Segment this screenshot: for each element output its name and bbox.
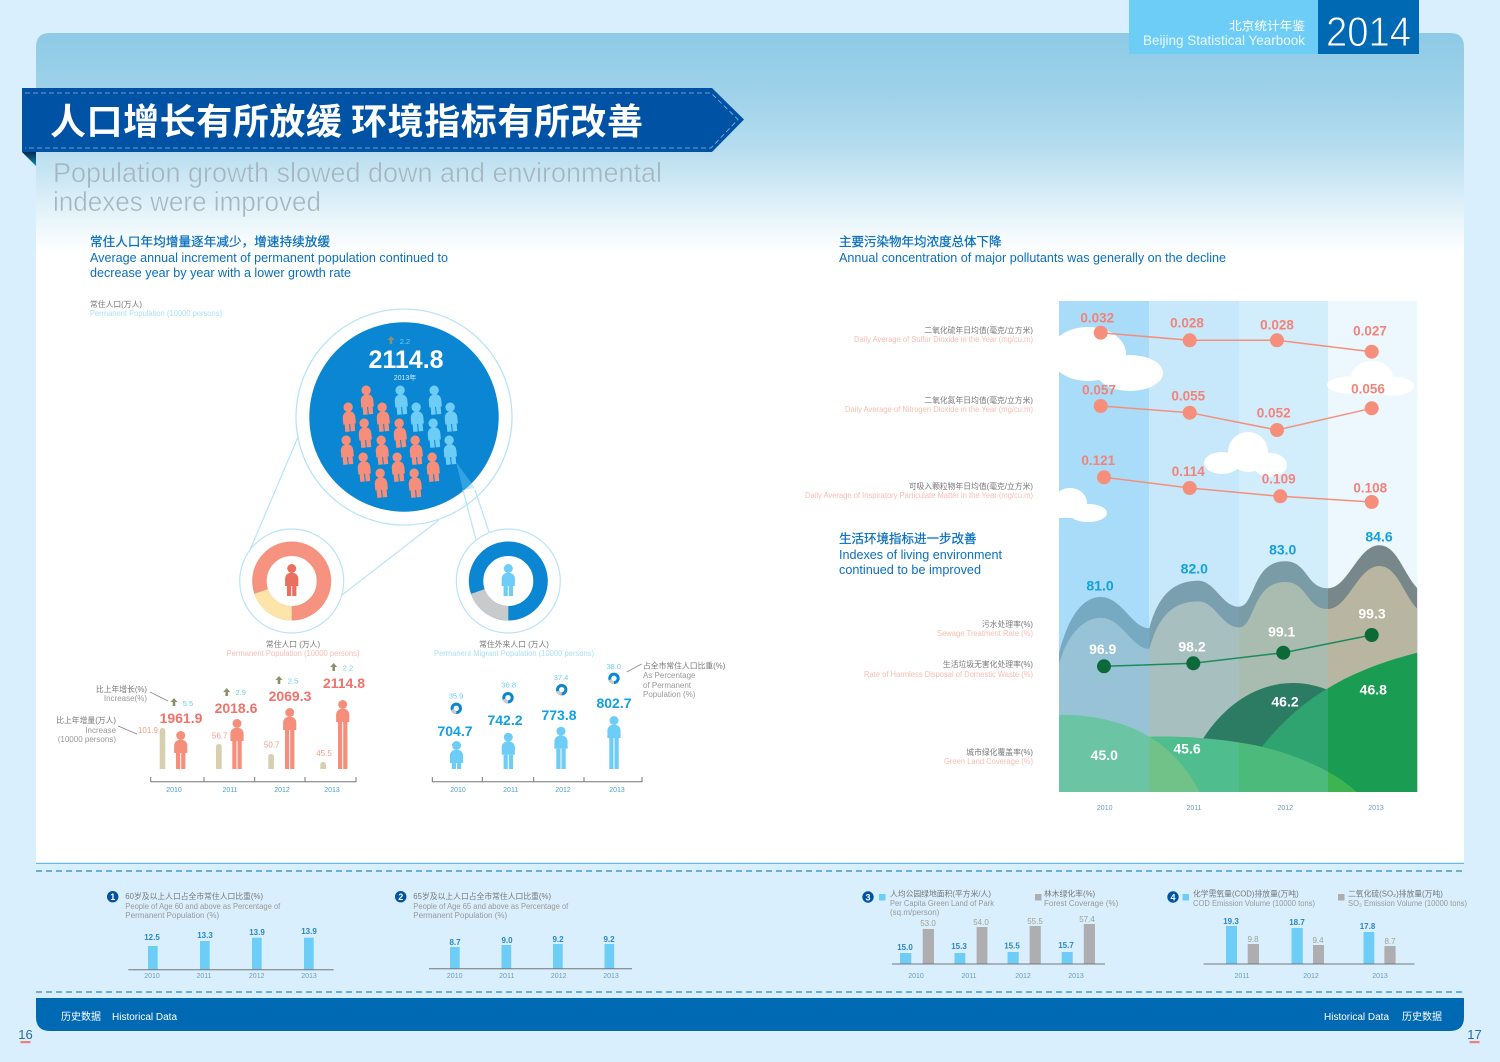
mini chart 4: COD and SO2 emission: 4 (1170, 892, 1176, 902)
line series: nitrogen dioxide: 0.055 (1171, 388, 1206, 403)
caption: permanent population: Permanent Population (10000 persons) (226, 649, 360, 658)
english subtitle: indexes were improved (53, 186, 321, 217)
mini chart 3: park green land and forest coverage: 54.0 (973, 918, 989, 927)
mini chart 3: park green land and forest coverage: Forest Coverage (%) (1044, 899, 1119, 908)
header tab: yearbook name and year: Beijing Statistical Yearbook (1143, 32, 1306, 48)
annotation: percentage of permanent population (627, 661, 726, 699)
mini donuts and shares: 38.0 (606, 662, 621, 671)
mini chart 3: park green land and forest coverage (862, 888, 1119, 980)
mini chart 4: COD and SO2 emission (1167, 888, 1467, 980)
mini donuts and shares (449, 662, 621, 712)
mini chart 4: COD and SO2 emission: 2013 (1372, 973, 1388, 980)
mini chart 1: age 60 and above: 2011 (196, 973, 212, 980)
mini chart 3: park green land and forest coverage: 57.4 (1079, 915, 1095, 924)
series labels for right chart: Green Land Coverage (%) (944, 757, 1033, 766)
increase values: 101.9 (138, 726, 159, 735)
year axis: 2012 (274, 787, 290, 794)
caption: migrant population (434, 639, 594, 658)
green coverage values: 45.6 (1173, 740, 1201, 756)
year labels: 2012 (1278, 805, 1293, 812)
chart: migrant population people bars (432, 661, 726, 794)
mini chart 3: park green land and forest coverage: 2012 (1015, 973, 1031, 980)
sewage treatment values: 81.0 (1086, 577, 1114, 593)
mini chart 1: age 60 and above: 2013 (301, 973, 317, 980)
line series: waste disposal rate: 99.1 (1268, 624, 1296, 640)
mini chart 2: age 65 and above: 9.2 (603, 935, 615, 944)
chart: permanent population people bars (56, 663, 365, 794)
series labels for right chart: 可吸入颗粒物年日均值(毫克/立方米) (909, 481, 1033, 491)
caption: permanent population: 常住人口 (万人) (266, 639, 320, 649)
series labels for right chart: 生活垃圾无害化处理率(%) (943, 659, 1033, 669)
green coverage values: 45.0 (1091, 747, 1118, 763)
footer bar: historical data: Historical Data (112, 1012, 177, 1023)
annotation: percentage of permanent population: 占全市常住人口比重(%) (643, 661, 726, 671)
footer bar: historical data: 历史数据 (61, 1010, 101, 1023)
clouds (1047, 327, 1414, 522)
mini chart 3: park green land and forest coverage: 15.3 (951, 942, 967, 951)
line series: nitrogen dioxide: 0.057 (1082, 382, 1116, 397)
mini chart 1: age 60 and above: 13.9 (249, 928, 265, 937)
mini chart 4: COD and SO2 emission: 17.8 (1360, 922, 1376, 931)
mini chart 3: park green land and forest coverage: 2011 (961, 973, 977, 980)
annotation: percentage of permanent population: of Permanent (643, 681, 692, 690)
annotation: percentage of permanent population: Population (%) (643, 690, 696, 699)
annotation labels: 比上年增长(%) (96, 684, 147, 694)
year axis: 2010 (166, 787, 182, 794)
mini chart 1: age 60 and above: 60岁及以上人口占全市常住人口比重(%) (125, 891, 263, 901)
mini chart 2: age 65 and above: Permanent Population (%) (413, 911, 507, 920)
mini donuts and shares: 35.9 (449, 692, 463, 701)
mini chart 4: COD and SO2 emission: 化学需氧量(COD)排放量(万吨) (1193, 888, 1299, 898)
sewage treatment values: 84.6 (1365, 529, 1393, 545)
series labels for right chart: 城市绿化覆盖率(%) (966, 747, 1033, 757)
english subtitle (53, 157, 662, 217)
mini chart 1: age 60 and above (107, 891, 334, 980)
mini chart 1: age 60 and above: People of Age 60 and above as Percentage of (125, 902, 281, 911)
mini chart 2: age 65 and above: 9.2 (552, 935, 564, 944)
big circle: 2013 population: 2114.8 (368, 346, 444, 374)
mini chart 3: park green land and forest coverage: 人均公园绿地面积(平方米/人) (890, 888, 991, 898)
year labels: 2013 (1368, 805, 1384, 812)
mini chart 1: age 60 and above: 13.9 (301, 927, 317, 936)
line series: waste disposal rate (1089, 606, 1386, 673)
right chart panel (1047, 301, 1417, 812)
line series: inspirable particulate matter (1081, 453, 1388, 509)
mini chart 3: park green land and forest coverage: 3 (865, 892, 871, 902)
population values (160, 675, 365, 726)
line series: nitrogen dioxide: 0.052 (1257, 406, 1291, 421)
mini donuts and shares: 36.8 (501, 681, 516, 690)
sewage treatment values: 82.0 (1181, 560, 1208, 576)
title ribbon (22, 88, 744, 166)
year labels: 2011 (1186, 805, 1202, 812)
mini chart 4: COD and SO2 emission: 19.3 (1223, 917, 1239, 926)
growth arrows and rates: 2.5 (288, 677, 298, 686)
mini chart 2: age 65 and above (395, 891, 632, 980)
mini chart 4: COD and SO2 emission: 9.4 (1312, 936, 1324, 945)
population values: 2069.3 (269, 688, 312, 704)
heading: population: 常住人口年均增量逐年减少，增速持续放缓 (90, 234, 330, 249)
footer bar: historical data (36, 998, 1464, 1031)
mini chart 3: park green land and forest coverage: 2013 (1068, 973, 1084, 980)
mini chart 4: COD and SO2 emission: 2012 (1303, 973, 1319, 980)
blue people (450, 716, 621, 769)
connector lines between circles (250, 437, 489, 595)
population values: 1961.9 (160, 710, 203, 726)
green hills: green land coverage (1059, 653, 1417, 792)
heading: population (90, 234, 448, 280)
line series: inspirable particulate matter: 0.108 (1353, 480, 1388, 495)
mini chart 1: age 60 and above: 1 (110, 892, 115, 902)
mini chart 3: park green land and forest coverage: 55.5 (1027, 917, 1043, 926)
big circle: 2013 population: 2.2 (400, 337, 410, 346)
footer bar: historical data: 历史数据 (1402, 1010, 1442, 1023)
series labels for right chart: Daily Average of Sulfur Dioxide in the Year (mg/cu.m) (854, 335, 1033, 344)
series labels for right chart: Daily Average of Nitrogen Dioxide in the Year (mg/cu.m) (845, 405, 1033, 414)
line series: nitrogen dioxide (1082, 381, 1385, 437)
line series: sulfur dioxide: 0.028 (1170, 315, 1204, 330)
line series: inspirable particulate matter: 0.114 (1172, 464, 1205, 479)
mini chart 4: COD and SO2 emission: 8.7 (1384, 937, 1396, 946)
heading: pollutants: Annual concentration of major pollutants was generally on the decline (839, 251, 1226, 265)
mini chart 4: COD and SO2 emission: SO₂ Emission Volume (10000 tons) (1348, 899, 1467, 908)
mini chart 2: age 65 and above: 65岁及以上人口占全市常住人口比重(%) (413, 891, 551, 901)
bottom strip dividers (36, 864, 1464, 992)
icon: coral and blue crowd (339, 385, 475, 498)
heading: living environment: Indexes of living environment (839, 548, 1003, 562)
year axis: 2011 (503, 787, 518, 794)
annotation labels: 比上年增量(万人) (56, 715, 116, 725)
series labels for right chart: 二氧化氮年日均值(毫克/立方米) (924, 395, 1033, 405)
label: permanent population: Permanent Population (10000 persons) (90, 309, 222, 318)
year labels: 2010 (1097, 805, 1113, 812)
annotation: percentage of permanent population: As Percentage (643, 671, 696, 680)
year axis: 2013 (324, 787, 340, 794)
heading: living environment (839, 531, 1003, 577)
header tab: yearbook name and year: 北京统计年鉴 (1229, 19, 1305, 33)
annotation labels: (10000 persons) (58, 735, 116, 744)
heading: pollutants: 主要污染物年均浓度总体下降 (839, 234, 1002, 249)
year axis: 2013 (609, 787, 625, 794)
annotation labels: Increase (85, 726, 117, 735)
line series: sulfur dioxide: 0.032 (1080, 310, 1114, 325)
caption: migrant population: 常住外来人口 (万人) (479, 639, 549, 649)
green coverage values: 46.8 (1360, 681, 1387, 697)
heading: population: Average annual increment of permanent population continued to (90, 251, 448, 265)
mini donuts and shares: 37.4 (554, 673, 568, 682)
line series: sulfur dioxide: 0.027 (1353, 324, 1387, 339)
title ribbon: 人口增长有所放缓 环境指标有所改善 (50, 93, 643, 145)
mini chart 3: park green land and forest coverage: 15.5 (1004, 942, 1020, 950)
label: permanent population: 常住人口(万人) (90, 299, 142, 309)
mini chart 2: age 65 and above: 2 (398, 892, 403, 902)
mini chart 2: age 65 and above: 9.0 (501, 936, 513, 945)
line series: waste disposal rate: 98.2 (1178, 638, 1206, 654)
mountain bands: sewage treatment and waste disposal (1059, 545, 1417, 800)
header tab: yearbook name and year: 2014 (1326, 8, 1411, 55)
mini chart 3: park green land and forest coverage: 53.0 (920, 919, 936, 928)
mini chart 1: age 60 and above: 2012 (249, 973, 265, 980)
increase values (138, 726, 332, 758)
main panel with gradient background (36, 33, 1464, 862)
mini chart 2: age 65 and above: People of Age 65 and above as Percentage of (413, 902, 569, 911)
mini chart 1: age 60 and above: Permanent Population (%) (125, 911, 219, 920)
page number 17: 17 (1467, 1027, 1482, 1042)
big circle: 2013 population: 2013年 (394, 373, 416, 382)
beige increase bars (160, 728, 326, 769)
mini chart 1: age 60 and above: 2010 (144, 973, 160, 980)
mini chart 3: park green land and forest coverage: 15.7 (1058, 941, 1074, 950)
mini chart 4: COD and SO2 emission: 2011 (1234, 973, 1250, 980)
increase values: 50.7 (264, 741, 280, 750)
mini chart 4: COD and SO2 emission: 18.7 (1289, 918, 1305, 927)
green coverage values: 46.2 (1271, 694, 1299, 710)
mini chart 1: age 60 and above: 12.5 (144, 933, 160, 942)
growth arrows and rates: 2.2 (343, 664, 353, 673)
migrant values: 773.8 (541, 707, 577, 723)
increase values: 56.7 (212, 732, 228, 741)
donut: migrant population (456, 529, 560, 633)
year axis: 2012 (555, 787, 571, 794)
series labels for right chart: Sewage Treatment Rate (%) (937, 629, 1033, 638)
line series: waste disposal rate: 96.9 (1089, 641, 1117, 657)
increase values: 45.5 (316, 749, 332, 758)
green coverage values (1091, 681, 1387, 763)
line series: inspirable particulate matter: 0.109 (1262, 471, 1296, 486)
series labels for right chart: 污水处理率(%) (982, 619, 1033, 629)
mini chart 2: age 65 and above: 2010 (447, 973, 463, 980)
population values: 2114.8 (323, 675, 365, 691)
year labels (1097, 805, 1384, 812)
mini chart 2: age 65 and above: 8.7 (449, 938, 461, 947)
year axis (432, 777, 642, 794)
growth arrows and rates: 2.9 (235, 688, 246, 697)
migrant values (437, 695, 632, 739)
migrant values: 704.7 (437, 723, 473, 739)
mini chart 1: age 60 and above: 13.3 (197, 931, 213, 940)
mini chart 4: COD and SO2 emission: COD Emission Volume (10000 tons) (1193, 899, 1315, 908)
mini chart 4: COD and SO2 emission: 二氧化硫(SO₂)排放量(万吨) (1348, 888, 1443, 898)
line series: sulfur dioxide: 0.028 (1260, 317, 1294, 332)
mini chart 2: age 65 and above: 2012 (551, 973, 567, 980)
big circle: 2013 population (296, 309, 512, 525)
series labels for right chart: Rate of Harmless Disposal of Domestic Waste (%) (864, 670, 1033, 679)
mini chart 3: park green land and forest coverage: (sq.m/person) (890, 908, 940, 917)
heading: living environment: continued to be improved (839, 563, 981, 577)
heading: living environment: 生活环境指标进一步改善 (839, 531, 977, 546)
header tab: yearbook name and year (1129, 0, 1419, 55)
mini chart 3: park green land and forest coverage: 15.0 (897, 943, 913, 952)
coral people (174, 700, 349, 769)
year axis (151, 777, 356, 794)
donut: permanent population (240, 529, 344, 633)
footer bar: historical data: Historical Data (1324, 1012, 1389, 1023)
line series: waste disposal rate: 99.3 (1358, 606, 1386, 622)
mini chart 2: age 65 and above: 2011 (499, 973, 514, 980)
caption: permanent population (226, 639, 360, 658)
year axis: 2011 (222, 787, 238, 794)
population values: 2018.6 (215, 700, 258, 716)
growth arrows and rates: 5.5 (183, 699, 193, 708)
english subtitle: Population growth slowed down and environmental (53, 157, 662, 188)
page number 16: 16 (18, 1027, 33, 1042)
sewage treatment values: 83.0 (1269, 542, 1297, 558)
year axis: 2010 (450, 787, 466, 794)
sewage treatment values (1086, 529, 1393, 593)
mini chart 3: park green land and forest coverage: 林木绿化率(%) (1044, 888, 1096, 898)
mini chart 2: age 65 and above: 2013 (603, 973, 619, 980)
line series: nitrogen dioxide: 0.056 (1351, 381, 1385, 396)
migrant values: 802.7 (596, 695, 632, 711)
mini chart 3: park green land and forest coverage: 2010 (908, 973, 924, 980)
heading: pollutants (839, 234, 1226, 265)
annotation labels (56, 684, 168, 744)
line series: sulfur dioxide (1080, 310, 1387, 359)
mini chart 3: park green land and forest coverage: Per Capita Green Land of Park (890, 899, 995, 908)
line series: inspirable particulate matter: 0.121 (1081, 453, 1116, 468)
series labels for right chart (805, 325, 1033, 766)
migrant values: 742.2 (487, 712, 523, 728)
caption: migrant population: Permanent Migrant Population (10000 persons) (434, 649, 594, 658)
mini chart 4: COD and SO2 emission: 9.8 (1247, 935, 1259, 944)
heading: population: decrease year by year with a lower growth rate (90, 266, 351, 280)
growth arrows and rates (170, 663, 353, 708)
series labels for right chart: Daily Average of Inspiratory Particulate Matter in the Year (mg/cu.m) (805, 491, 1033, 500)
sky strips (1059, 301, 1417, 792)
annotation labels: Increase(%) (104, 694, 147, 703)
label: permanent population (90, 299, 222, 318)
series labels for right chart: 二氧化硫年日均值(毫克/立方米) (924, 325, 1033, 335)
